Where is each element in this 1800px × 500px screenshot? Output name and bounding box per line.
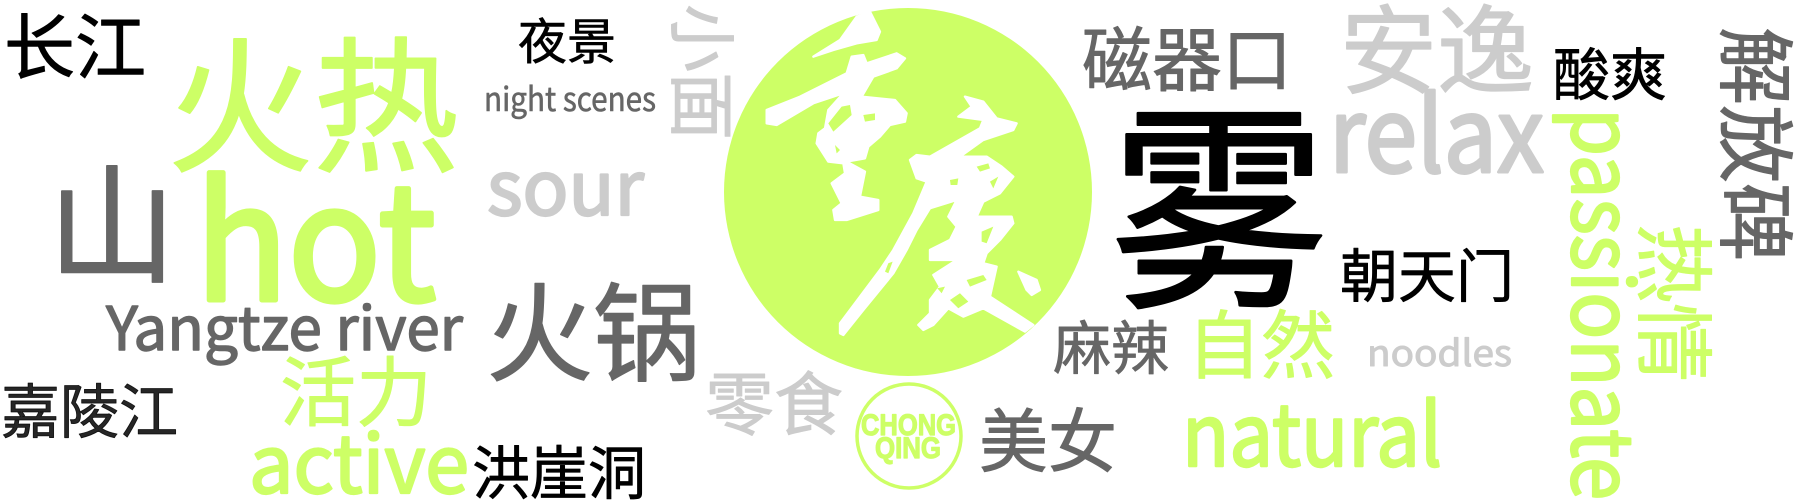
circle logo: 重庆 calligraphy [724,8,1092,376]
word: sour: sour [487,128,645,237]
word: relax: relax [1329,53,1544,202]
word: 嘉陵江: 嘉陵江 [1,365,178,450]
word: 酸爽: 酸爽 [1553,30,1667,112]
word: 雾: 雾 [1110,37,1328,353]
logo badge: CHONG QING: QING [875,432,941,465]
word: 朝天门: 朝天门 [1340,230,1514,314]
word: 麻辣: 麻辣 [1053,302,1169,386]
word: 火锅: 火锅 [486,248,700,403]
word: 小面: 小面 [657,4,756,140]
word: 自然: 自然 [1187,287,1335,394]
word: 零食: 零食 [705,349,843,449]
word: 热情: 热情 [1622,224,1737,382]
word: 夜景: 夜景 [518,3,616,74]
word: 活力: 活力 [280,332,432,442]
word: 磁器口: 磁器口 [1082,5,1292,106]
logo badge: CHONG QING [857,384,961,488]
word: 美女: 美女 [979,386,1117,486]
word: 山: 山 [48,124,176,309]
word: night scenes: night scenes [484,73,656,121]
word: natural: natural [1182,366,1442,491]
word: hot: hot [195,115,436,347]
word: Yangtze river: Yangtze river [105,281,464,368]
logo badge: CHONG QING: CHONG [861,409,956,442]
word: noodles: noodles [1367,325,1512,377]
